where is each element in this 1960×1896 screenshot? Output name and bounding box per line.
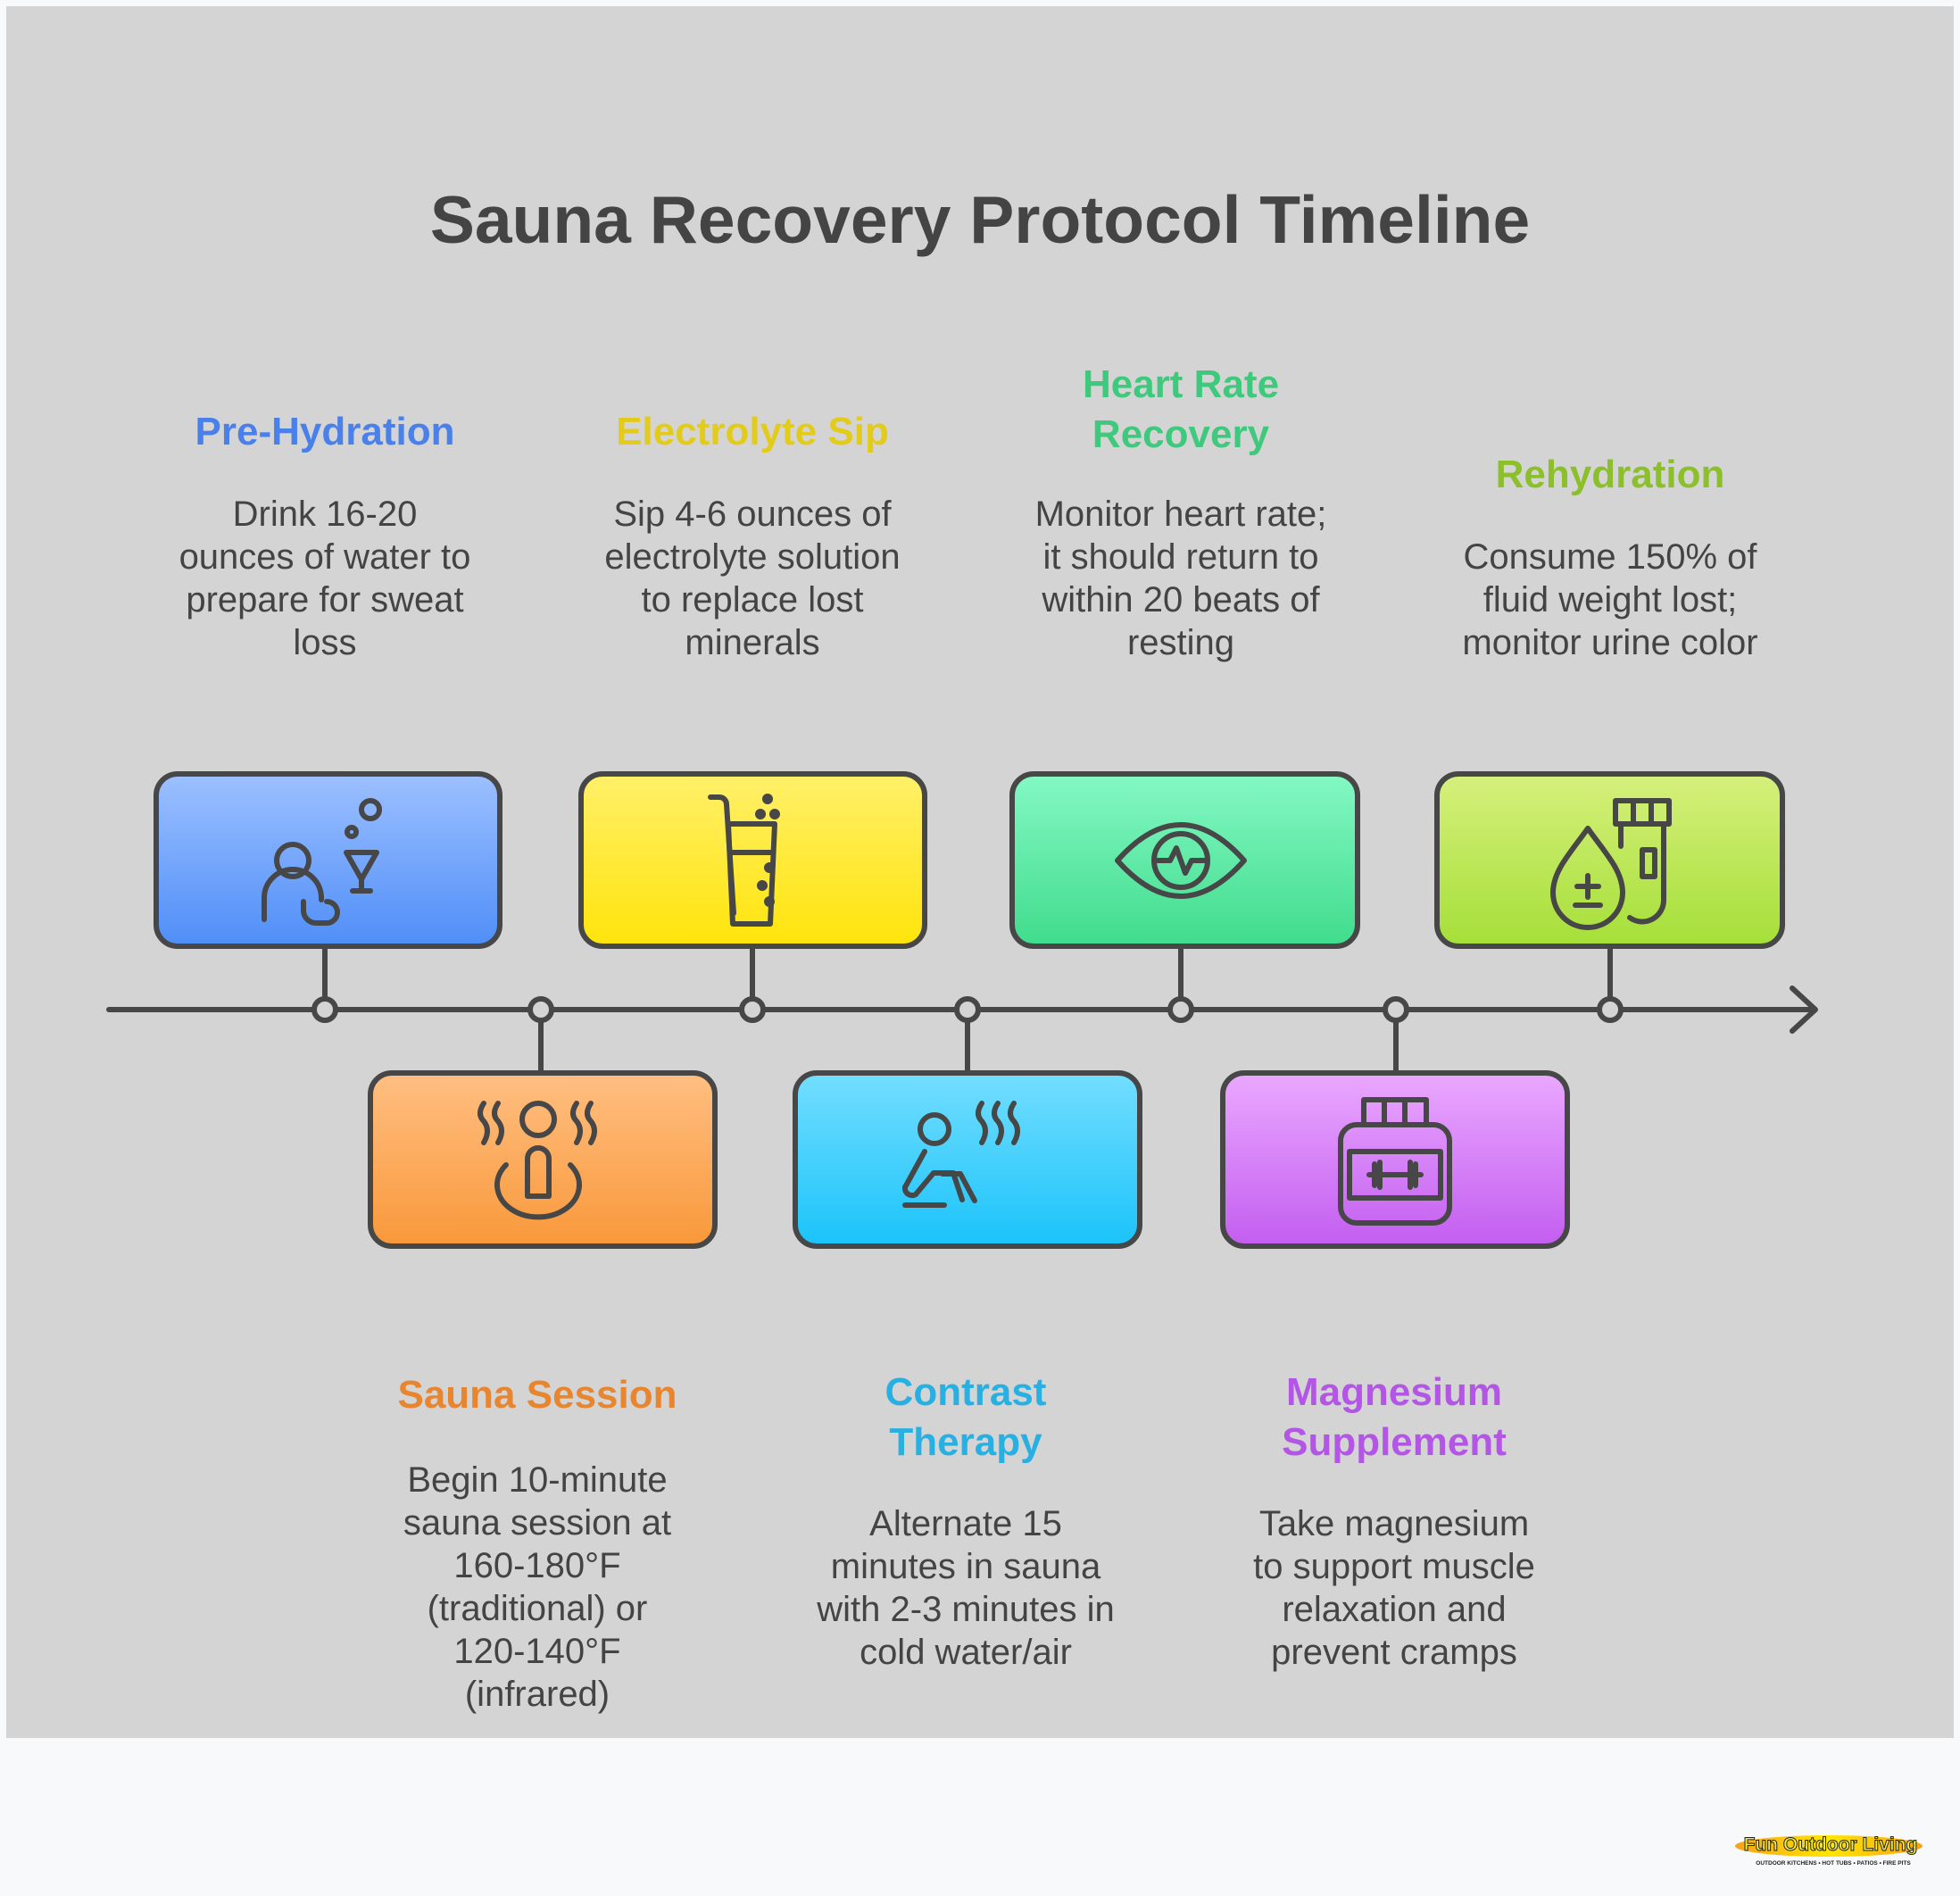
text: magnesium supplement [1253, 1370, 1535, 1672]
text: sauna session: Begin 10-minute [407, 1460, 668, 1500]
logo: Fun Outdoor Living [1744, 1834, 1917, 1855]
text: contrast therapy: minutes in sauna [831, 1547, 1100, 1586]
box: magnesium [1223, 1073, 1567, 1246]
text: sauna session: 120-140°F [453, 1632, 621, 1671]
icon: drop and test tube [1553, 801, 1669, 927]
text: contrast therapy: with 2-3 minutes in [817, 1590, 1115, 1629]
text: magnesium supplement: Take magnesium [1259, 1504, 1529, 1543]
text: contrast therapy: Contrast Therapy [885, 1370, 1046, 1464]
text: electrolyte sip: Electrolyte Sip [616, 410, 889, 453]
connectors [325, 946, 1610, 1073]
text: heart rate recovery: within 20 beats of [1042, 580, 1320, 620]
icon: eye with pulse [1117, 825, 1244, 896]
text: magnesium supplement: relaxation and [1282, 1590, 1507, 1629]
text: heart rate recovery: resting [1127, 623, 1234, 662]
box: heart rate [1012, 774, 1358, 946]
text: pre-hydration: loss [293, 623, 357, 662]
text: magnesium supplement: to support muscle [1253, 1547, 1535, 1586]
text: contrast therapy: cold water/air [860, 1633, 1072, 1672]
text: sauna session: 160-180°F [453, 1546, 621, 1585]
text: rehydration: fluid weight lost; [1483, 580, 1737, 620]
text: electrolyte sip [604, 410, 901, 662]
box: sauna session [370, 1073, 715, 1246]
text: sauna session: (traditional) or [428, 1589, 647, 1628]
text: pre-hydration: prepare for sweat [186, 580, 464, 620]
text: rehydration: Consume 150% of [1463, 537, 1757, 577]
logo: OUTDOOR KITCHENS • HOT TUBS • PATIOS • FIRE PITS [1756, 1860, 1911, 1867]
text: heart rate recovery: it should return to [1042, 537, 1319, 577]
text: rehydration: Rehydration [1496, 453, 1724, 496]
text: rehydration: monitor urine color [1462, 623, 1758, 662]
icon: glass with straw [710, 796, 777, 924]
text: magnesium supplement: Magnesium Supplement [1282, 1370, 1507, 1464]
text: pre-hydration: Drink 16-20 [233, 495, 417, 534]
text: electrolyte sip: to replace lost [641, 580, 864, 620]
text: electrolyte sip: Sip 4-6 ounces of [613, 495, 892, 534]
icon: person in sauna steam [480, 1103, 594, 1217]
timeline arrow [109, 988, 1815, 1031]
text: pre-hydration: Pre-Hydration [195, 410, 454, 453]
text: heart rate recovery: Monitor heart rate; [1035, 495, 1326, 534]
icon: supplement jar [1341, 1100, 1449, 1223]
text: pre-hydration: ounces of water to [179, 537, 470, 577]
icon: reclining person with heat [905, 1103, 1017, 1205]
icon: person with drink [264, 801, 379, 923]
text: heart rate recovery: Heart Rate Recovery [1083, 362, 1279, 456]
title: Sauna Recovery Protocol Timeline [430, 182, 1530, 257]
text: sauna session: Sauna Session [397, 1373, 677, 1417]
box: electrolyte sip [581, 774, 925, 946]
text: magnesium supplement: prevent cramps [1271, 1633, 1517, 1672]
text: heart rate recovery [1035, 362, 1326, 662]
text: sauna session: (infrared) [465, 1675, 610, 1714]
text: sauna session: sauna session at [403, 1503, 671, 1543]
timeline nodes [314, 999, 1621, 1020]
text: electrolyte sip: electrolyte solution [604, 537, 901, 577]
box: rehydration [1437, 774, 1782, 946]
box: pre-hydration [156, 774, 500, 946]
text: pre-hydration [179, 410, 470, 662]
text: sauna session [397, 1373, 677, 1714]
logo [1735, 1834, 1923, 1867]
text: contrast therapy: Alternate 15 [869, 1504, 1062, 1543]
text: rehydration [1462, 453, 1758, 662]
text: contrast therapy [817, 1370, 1115, 1672]
text: electrolyte sip: minerals [685, 623, 820, 662]
box: contrast therapy [795, 1073, 1140, 1246]
